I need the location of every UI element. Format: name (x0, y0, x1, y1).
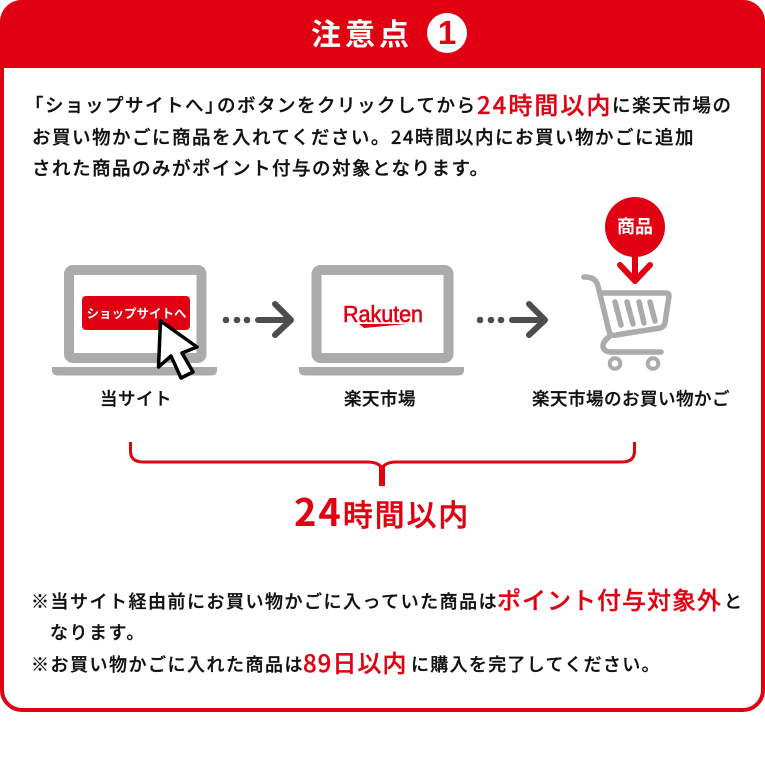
notes: ポイント付与対象外 (497, 581, 722, 616)
intro text: に楽天市場の (612, 92, 733, 118)
header bar (0, 0, 765, 68)
label: Rakuten market: 楽天市場 (344, 386, 416, 411)
laptop: our site (52, 270, 217, 378)
notes: ※当サイト経由前にお買い物かごに入っていた商品は (31, 588, 498, 614)
notes: 89日以内 (303, 644, 407, 679)
intro text (25, 86, 733, 181)
notes (31, 581, 744, 679)
product badge and arrow (605, 197, 665, 281)
shop button: ショップサイトへ (86, 303, 187, 322)
24 hours callout: 24時間以内 (294, 482, 470, 537)
notes: に購入を完了してください。 (411, 651, 661, 677)
notes: なります。 (50, 619, 146, 645)
intro text: 24時間以内 (477, 86, 612, 121)
shop button (82, 296, 190, 330)
arrow: Rakuten to cart (477, 304, 545, 335)
intro text: お買い物かごに商品を入れてください。24時間以内にお買い物かごに追加 (32, 124, 695, 150)
product badge and arrow: 商品 (617, 213, 653, 239)
title number badge (427, 13, 467, 53)
Rakuten logo: Rakuten (343, 301, 423, 327)
arrow: site to Rakuten (223, 304, 291, 335)
label: our site: 当サイト (100, 386, 172, 411)
icon: shopping cart (584, 277, 669, 369)
title: 注意点 (311, 10, 413, 54)
intro text: された商品のみがポイント付与の対象となります。 (32, 155, 490, 181)
notes: ※お買い物かごに入れた商品は (31, 651, 304, 677)
icon: cursor (158, 321, 197, 378)
laptop: Rakuten (299, 270, 464, 376)
notes: と (724, 588, 744, 614)
intro text: 「ショップサイトへ」 (25, 92, 225, 118)
label: Rakuten cart: 楽天市場のお買い物かご (532, 386, 730, 411)
intro text: のボタンをクリックしてから (217, 92, 476, 118)
title number badge: 1 (438, 14, 456, 51)
brace: 24 hours (130, 442, 634, 486)
